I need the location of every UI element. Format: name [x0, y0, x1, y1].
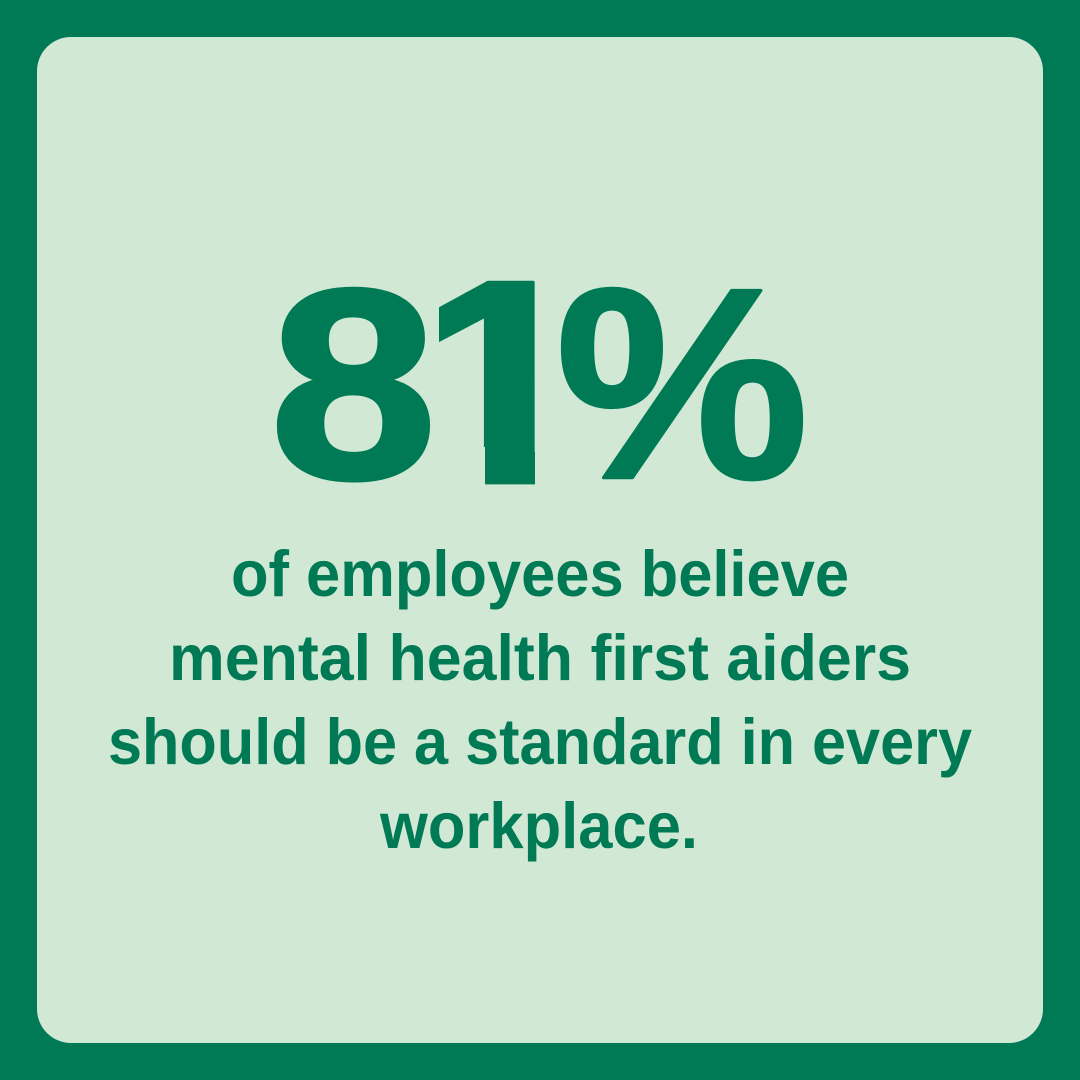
line 1: of employees believe — [231, 537, 849, 610]
line 2: mental health first aiders — [169, 621, 911, 694]
line 3: should be a standard in every — [108, 705, 972, 778]
percent sign: % — [556, 233, 809, 536]
text block: description — [108, 537, 972, 862]
digit 1: 1 — [404, 219, 597, 545]
digit 8: 8 — [270, 234, 437, 535]
headline statistic: 81% — [276, 280, 804, 484]
line 4: workplace. — [379, 789, 698, 862]
